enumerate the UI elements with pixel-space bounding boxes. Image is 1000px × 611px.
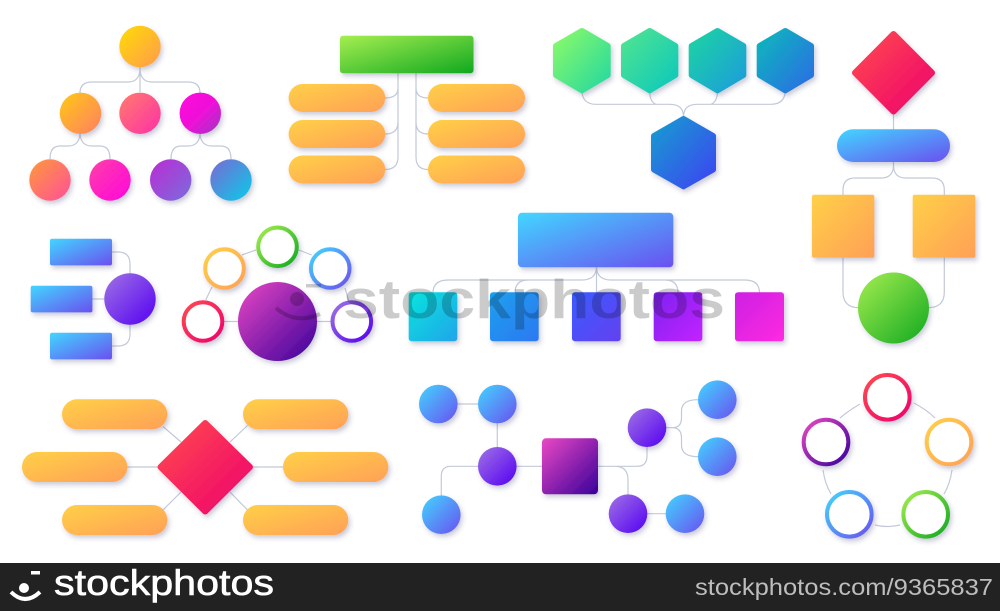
hexagon connectors (582, 92, 785, 117)
pill top left (62, 399, 167, 429)
ring blue (827, 492, 872, 537)
pill middle right (283, 452, 388, 482)
diamond connectors (127, 426, 283, 510)
watermark logo (276, 284, 321, 318)
hexagon 2 (624, 31, 675, 90)
second level node: orange (60, 93, 101, 134)
green header box (340, 36, 474, 73)
ring green (903, 492, 948, 537)
right pill 2 (428, 120, 525, 148)
header connectors (385, 73, 428, 170)
blue pill (837, 129, 950, 162)
purple node 2 (628, 408, 666, 447)
panel: pentagon ring cycle (804, 375, 971, 537)
panel: three blue boxes to purple circle (31, 239, 156, 359)
pill middle left (22, 452, 127, 482)
orange square left (812, 195, 874, 258)
square cyan (409, 292, 457, 341)
leaf node: orange pink (29, 159, 71, 201)
cycle arcs (823, 403, 952, 526)
hexagon 3 (692, 31, 743, 90)
blue box bottom (50, 333, 112, 359)
panel: circle tree diagram (29, 26, 252, 201)
left pill 3 (289, 156, 385, 184)
ring red (184, 302, 222, 341)
flowchart connectors (843, 114, 944, 308)
second level node: magenta (180, 93, 221, 134)
network connectors (441, 400, 698, 514)
panel: node network around purple square (419, 380, 737, 534)
tree connectors (50, 67, 231, 159)
blue node 6 (666, 494, 704, 533)
blue box middle (31, 286, 92, 312)
square blue (490, 292, 539, 341)
pill top right (243, 399, 348, 429)
box connectors (92, 252, 130, 346)
orange square right (913, 195, 975, 258)
panel: hexagon merge diagram (556, 31, 811, 186)
right pill 3 (428, 156, 525, 184)
ring purple (332, 302, 371, 341)
ring connectors (206, 250, 349, 322)
pill bottom left (62, 505, 167, 535)
blue node 3 (422, 495, 461, 534)
pill bottom right (243, 505, 348, 535)
second level node: coral (119, 93, 161, 134)
right pill 1 (428, 84, 525, 112)
purple square (542, 438, 598, 494)
blue node 1 (419, 385, 458, 423)
square magenta (735, 292, 784, 341)
ring blue (311, 249, 350, 288)
ring purple (804, 420, 848, 464)
panel: green header with six orange pills (289, 36, 525, 184)
footer logo icon (11, 571, 40, 599)
left pill 1 (289, 84, 385, 112)
ring orange (927, 420, 971, 464)
hexagon 4 (760, 31, 811, 90)
large hexagon (654, 119, 713, 186)
leaf node: pink (89, 159, 131, 201)
panel: blue header with five squares (409, 213, 784, 341)
footer brand name: stockphotos (54, 562, 274, 603)
panel: red diamond with six orange pills (22, 399, 388, 535)
leaf node: blue (210, 159, 252, 201)
purple circle (104, 273, 156, 325)
header connectors (433, 267, 760, 293)
purple node 1 (478, 447, 517, 486)
hexagon 1 (556, 31, 608, 90)
blue node 5 (698, 437, 737, 476)
square indigo (572, 292, 621, 341)
footer image id: stockphotos.com/9365837 (695, 574, 993, 600)
panel: ring arc around large circle (184, 228, 371, 361)
green circle (858, 272, 929, 344)
panel: vertical decision flowchart (812, 34, 975, 344)
blue box top (50, 239, 112, 265)
root node (119, 26, 161, 67)
watermark (276, 268, 725, 330)
left pill 2 (289, 120, 385, 148)
footer bar (0, 562, 1000, 611)
blue node 2 (478, 385, 517, 423)
blue node 4 (698, 380, 737, 419)
blue header box (518, 213, 673, 267)
red diamond (160, 423, 250, 512)
watermark text: stockphotos (343, 268, 725, 330)
ring orange (205, 249, 244, 288)
red diamond (855, 34, 932, 112)
ring green (258, 228, 297, 266)
square violet (654, 292, 702, 341)
large purple circle (238, 282, 317, 361)
purple node 3 (609, 494, 647, 533)
leaf node: purple (150, 159, 191, 201)
ring crimson (865, 375, 910, 420)
